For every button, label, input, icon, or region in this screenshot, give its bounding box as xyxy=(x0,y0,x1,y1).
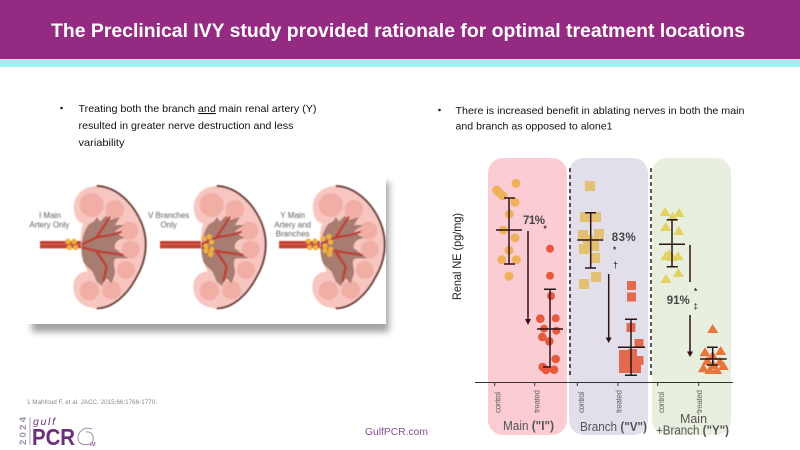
axis tick labels: treated xyxy=(614,390,624,413)
scatter chart xyxy=(450,158,733,438)
group labels xyxy=(503,412,729,438)
83% reduction label: 83% xyxy=(612,232,636,244)
axis tick labels: treated xyxy=(532,390,542,413)
logo: gulf PCR 2024: IM xyxy=(90,442,96,448)
kidney: Y main artery and branches: Y Main xyxy=(280,211,305,220)
group labels: +Branch ("Y") xyxy=(656,424,729,438)
axis tick labels: control xyxy=(657,392,666,413)
main I data points xyxy=(492,179,563,374)
left bullet text: Treating both the branch and main renal artery (Y) xyxy=(78,103,316,115)
left bullet text: resulted in greater nerve destruction and less xyxy=(78,120,294,132)
kidney: I main artery only xyxy=(29,186,146,308)
panel: branch V xyxy=(569,158,648,435)
x axis xyxy=(475,382,733,386)
arrow: main I xyxy=(525,231,531,325)
axis tick labels: treated xyxy=(695,390,704,413)
scatter chart: * xyxy=(694,287,698,296)
91% reduction label: 91% xyxy=(667,295,690,307)
right bullet text: and branch as opposed to alone1 xyxy=(456,120,613,132)
arrow: main + branch Y xyxy=(687,245,693,357)
footnote reference: 1 Mahfoud F, et al. JACC. 2015;66:1766-1770. xyxy=(27,399,157,406)
branch V data points xyxy=(577,181,645,375)
axis tick labels: control xyxy=(577,392,586,413)
arrow: branch V xyxy=(606,274,612,343)
kidney: I main artery only: Artery Only xyxy=(29,220,69,229)
logo: gulf PCR 2024: PCR xyxy=(32,424,75,450)
group labels: Main ("I") xyxy=(503,419,554,433)
group labels: Main xyxy=(680,412,707,426)
y axis title: Renal NE (pg/mg) xyxy=(450,213,464,300)
scatter chart: ‡ xyxy=(694,302,698,311)
logo: gulf PCR 2024: 2024 xyxy=(18,416,29,445)
kidney: Y main artery and branches: Branches xyxy=(276,229,310,238)
kidney image panel xyxy=(25,175,389,332)
right bullet text: There is increased benefit in ablating nerves in both the main xyxy=(456,105,745,117)
right bullet text xyxy=(438,105,745,132)
kidney: V branches only xyxy=(148,186,266,308)
kidney: I main artery only: I Main xyxy=(39,211,61,220)
kidney: V branches only: Only xyxy=(160,220,177,229)
title: The Preclinical IVY study provided rationale for optimal treatment locations xyxy=(51,21,745,42)
kidney: V branches only: V Branches xyxy=(148,211,189,220)
axis tick labels: control xyxy=(494,392,502,413)
scatter chart: * xyxy=(613,246,617,254)
scatter chart: * xyxy=(544,224,548,234)
kidney: Y main artery and branches xyxy=(274,186,385,308)
group labels: Branch ("V") xyxy=(580,420,647,434)
panel: main + branch Y xyxy=(652,158,731,435)
website url: GulfPCR.com xyxy=(365,426,428,438)
left bullet text xyxy=(60,103,316,149)
left bullet text: variability xyxy=(78,137,125,149)
scatter chart: † xyxy=(613,260,618,270)
panel: main I xyxy=(488,158,567,435)
main + branch Y data points xyxy=(659,207,729,374)
axis tick labels xyxy=(494,390,704,413)
kidney: Y main artery and branches: Artery and xyxy=(274,220,311,229)
logo: gulf PCR 2024: gulf xyxy=(33,416,56,428)
logo: gulf PCR 2024 xyxy=(18,416,96,450)
71% reduction label: 71% xyxy=(523,215,545,227)
header band xyxy=(0,0,800,67)
